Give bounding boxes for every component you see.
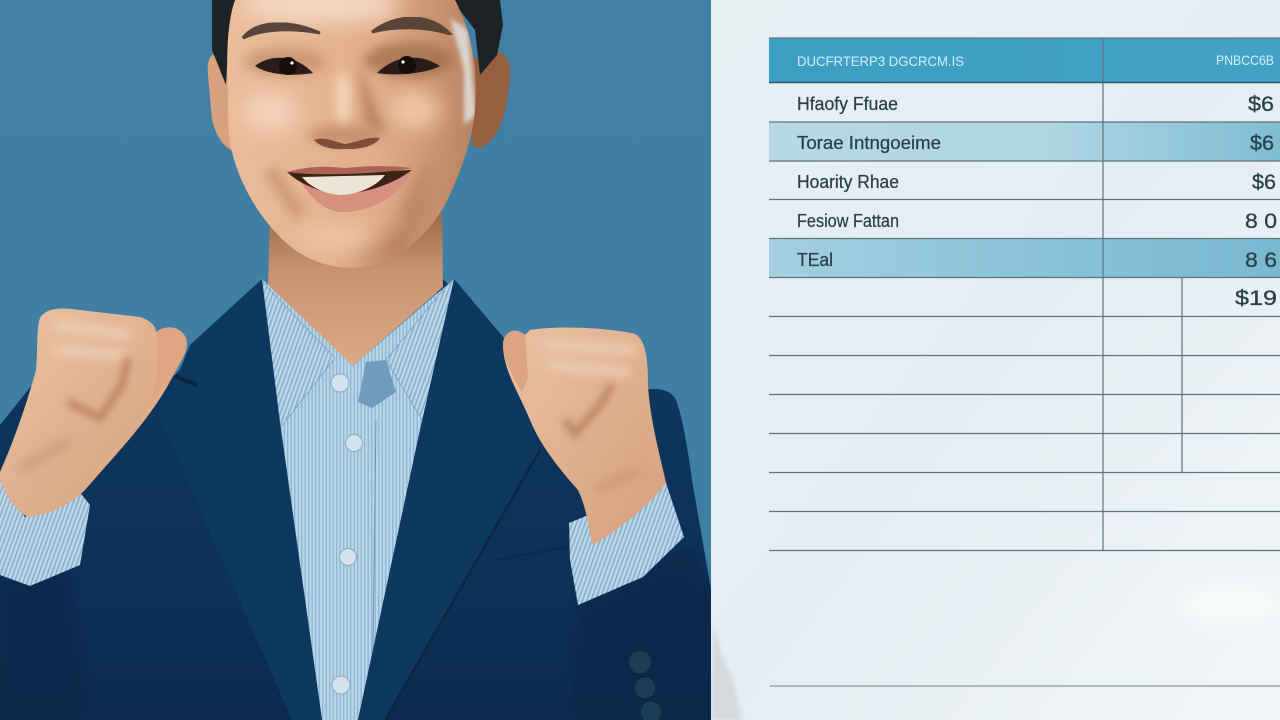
left eyebrow xyxy=(243,24,320,38)
forehead highlight xyxy=(240,0,400,23)
highlighted row: second xyxy=(769,122,1280,161)
soft highlight xyxy=(1175,585,1280,625)
header labels: DUCFRTERP3 DGCRCM.IS xyxy=(797,53,964,69)
right shirt cuff xyxy=(569,483,684,605)
table rules xyxy=(769,38,1280,686)
head xyxy=(208,0,510,272)
right lapel xyxy=(358,279,504,720)
lower lip xyxy=(300,172,410,212)
person xyxy=(0,0,711,720)
face xyxy=(227,0,476,268)
right thumb xyxy=(503,331,528,392)
upper lip xyxy=(287,166,412,174)
smile lines shading xyxy=(270,165,430,215)
jacket xyxy=(0,279,711,720)
eye socket shading xyxy=(245,48,325,76)
right fist xyxy=(503,327,666,545)
price values: $6 xyxy=(1250,132,1274,155)
shirt placket line xyxy=(372,420,376,652)
shirt collar knot xyxy=(358,360,396,408)
price values: $19 xyxy=(1235,287,1277,310)
row labels: Hfaofy Ffuae xyxy=(797,94,898,114)
mouth opening xyxy=(287,170,412,194)
left lapel notch xyxy=(175,376,197,385)
right knuckle highlights xyxy=(545,345,635,372)
row labels: Fesiow Fattan xyxy=(797,211,899,231)
table xyxy=(769,38,1280,686)
row labels xyxy=(797,94,941,270)
cheek highlights xyxy=(242,92,298,132)
right eyebrow xyxy=(372,18,450,34)
highlighted row: total xyxy=(769,238,1280,277)
right ear xyxy=(472,51,510,148)
shirt xyxy=(262,279,454,720)
jacket pocket xyxy=(491,547,567,561)
left ear xyxy=(208,53,231,150)
left thumb xyxy=(154,327,187,392)
nose underside shading xyxy=(309,125,381,145)
left fist xyxy=(0,309,187,517)
price values: 8 6 xyxy=(1245,249,1277,272)
header labels xyxy=(797,52,1274,69)
left eye xyxy=(255,57,313,75)
price values: $6 xyxy=(1252,171,1276,194)
panel: blue photo background xyxy=(0,0,711,720)
temple highlight xyxy=(450,18,476,125)
torn sheet corner xyxy=(711,625,742,720)
price values xyxy=(1235,93,1277,310)
right finger fold shadow xyxy=(565,385,612,434)
nose xyxy=(314,138,380,149)
nose bridge highlight xyxy=(336,72,350,124)
jaw shading xyxy=(345,165,445,272)
right eye xyxy=(377,56,440,74)
hair xyxy=(212,0,503,85)
shirt buttons xyxy=(331,374,362,694)
row labels: TEal xyxy=(797,250,833,270)
shirt collar right xyxy=(386,279,454,420)
left finger fold shadow xyxy=(68,358,128,418)
sleeve buttons xyxy=(628,650,662,720)
price values: $6 xyxy=(1248,93,1274,116)
left shirt cuff xyxy=(0,480,90,586)
neck xyxy=(268,215,443,366)
left lapel xyxy=(180,279,322,720)
teeth xyxy=(302,175,385,195)
row labels: Hoarity Rhae xyxy=(797,172,899,192)
smile xyxy=(287,166,412,212)
right lapel edge xyxy=(385,450,540,720)
price values: 8 0 xyxy=(1245,210,1277,233)
nose side shading xyxy=(358,60,388,135)
table header row xyxy=(769,38,1280,82)
shirt collar left xyxy=(261,279,335,428)
jacket sleeve shading xyxy=(0,545,711,720)
row labels: Torae Intngoeime xyxy=(797,133,941,153)
panel: price table sheet xyxy=(711,0,1280,720)
chin highlight xyxy=(297,226,373,250)
left knuckle highlights xyxy=(55,325,130,355)
